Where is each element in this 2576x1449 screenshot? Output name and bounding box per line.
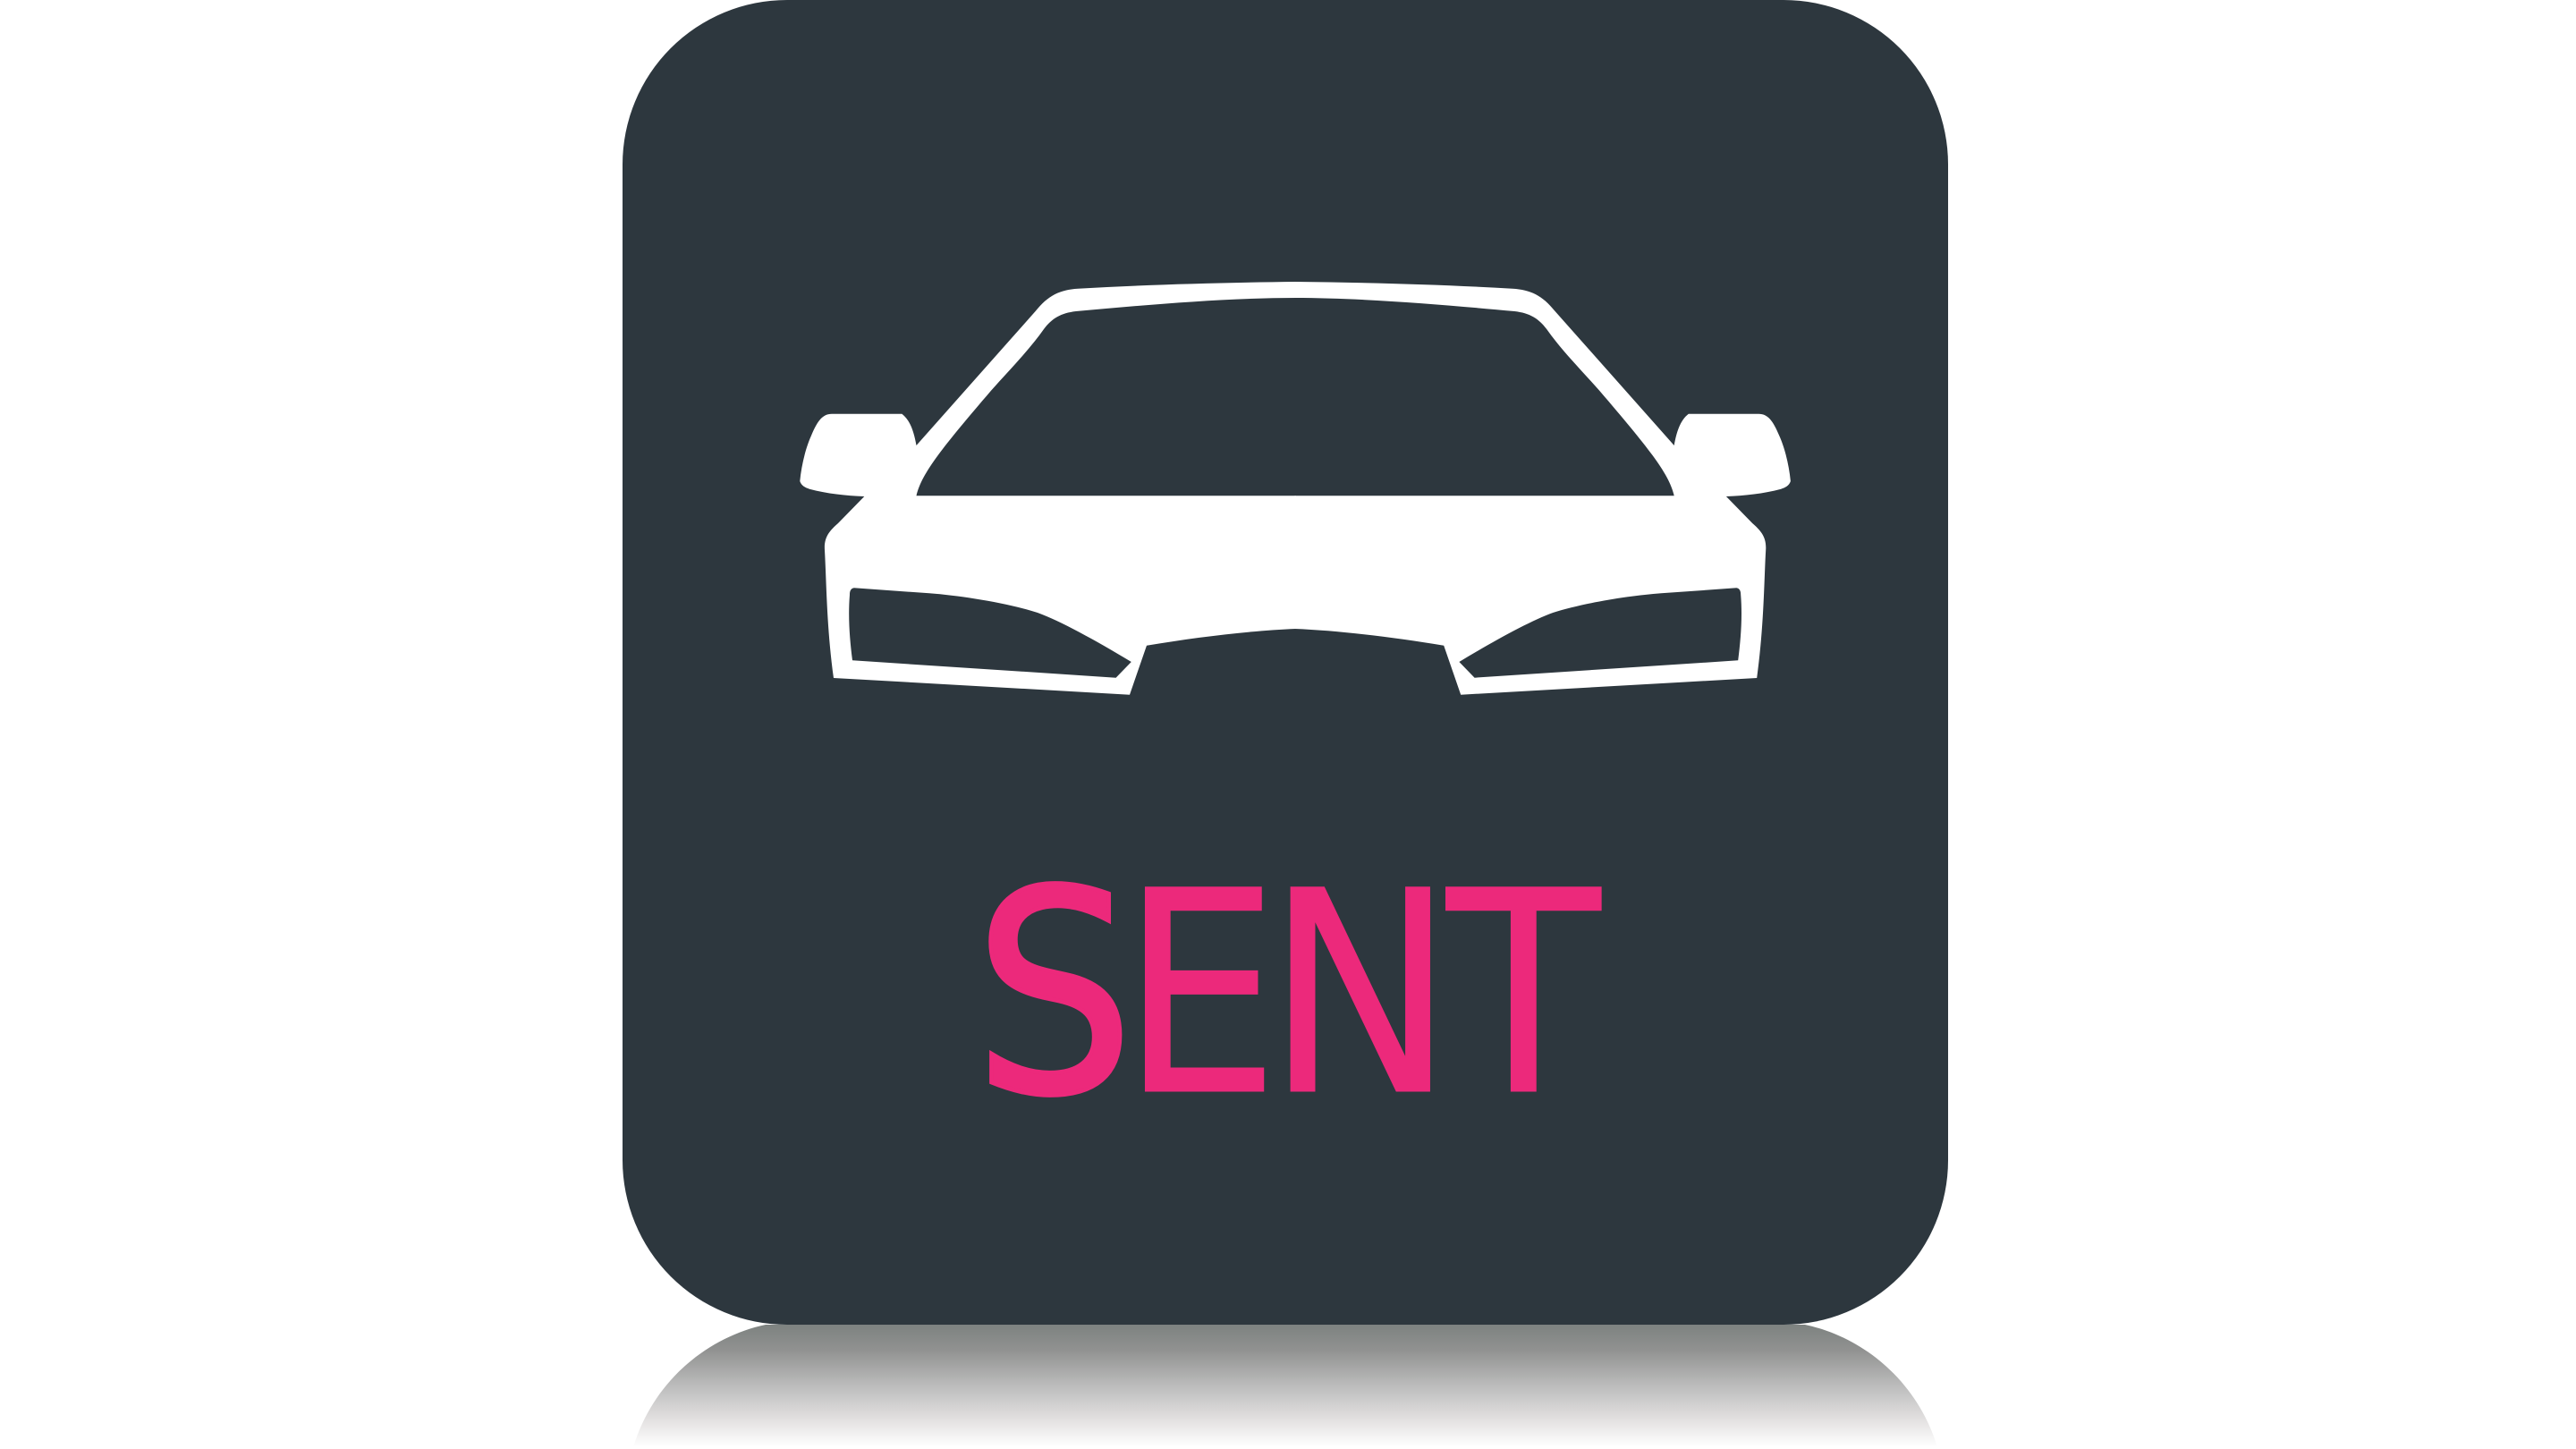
icon: car front view [800,282,1791,695]
badge panel [623,0,1948,1325]
reflection of badge [633,1325,1937,1447]
label: SENT: SENT [974,833,1604,1158]
car right half [1295,282,1791,695]
car left half [800,282,1296,695]
